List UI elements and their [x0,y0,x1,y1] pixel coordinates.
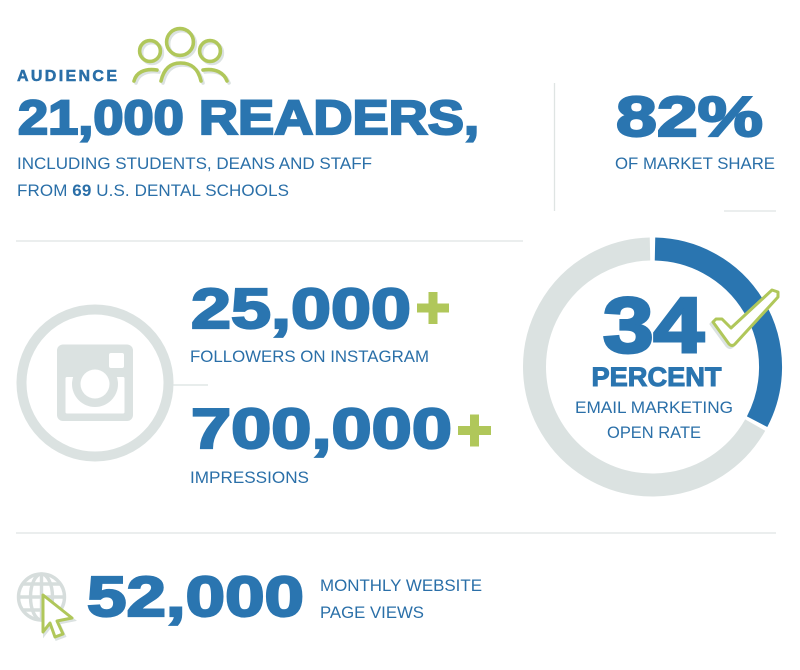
stat: 25,000+: 25,000 [191,277,411,341]
stat: 34: 34 [603,281,704,369]
text: page views: PAGE VIEWS [320,603,424,622]
icon: instagram [22,310,208,456]
text: open rate: OPEN RATE [607,423,701,442]
icon: globe with cursor [18,574,74,639]
stat: 82%: 82% [616,85,763,149]
headline: readers: 21,000 READERS, [18,92,479,145]
text: impressions: IMPRESSIONS [190,468,309,487]
text: percent: PERCENT [592,362,722,392]
text: followers on instagram: FOLLOWERS ON INSTAGRAM [190,347,429,366]
stat: 52,000: 52,000 [87,565,304,629]
text: email marketing: EMAIL MARKETING [575,398,733,417]
panel: market share [615,85,775,173]
stat: 25,000+ [191,277,449,341]
text: including students: INCLUDING STUDENTS, DEANS AND STAFF [17,154,372,173]
heading: audience: AUDIENCE [17,68,117,85]
panel: email open rate [535,249,778,485]
text: monthly website: MONTHLY WEBSITE [320,576,482,595]
panel: audience [17,29,479,200]
panel: website [18,565,482,639]
donut chart [535,249,771,485]
stat: 700,000+: 700,000 [191,397,452,461]
icon: checkmark [711,290,778,348]
text: from 69 schools: FROM 69 U.S. DENTAL SCHOOLS [17,181,289,200]
panel: instagram [22,277,491,487]
text: of market share: OF MARKET SHARE [615,154,775,173]
icon: people [134,29,229,83]
stat: 700,000+ [191,397,491,461]
